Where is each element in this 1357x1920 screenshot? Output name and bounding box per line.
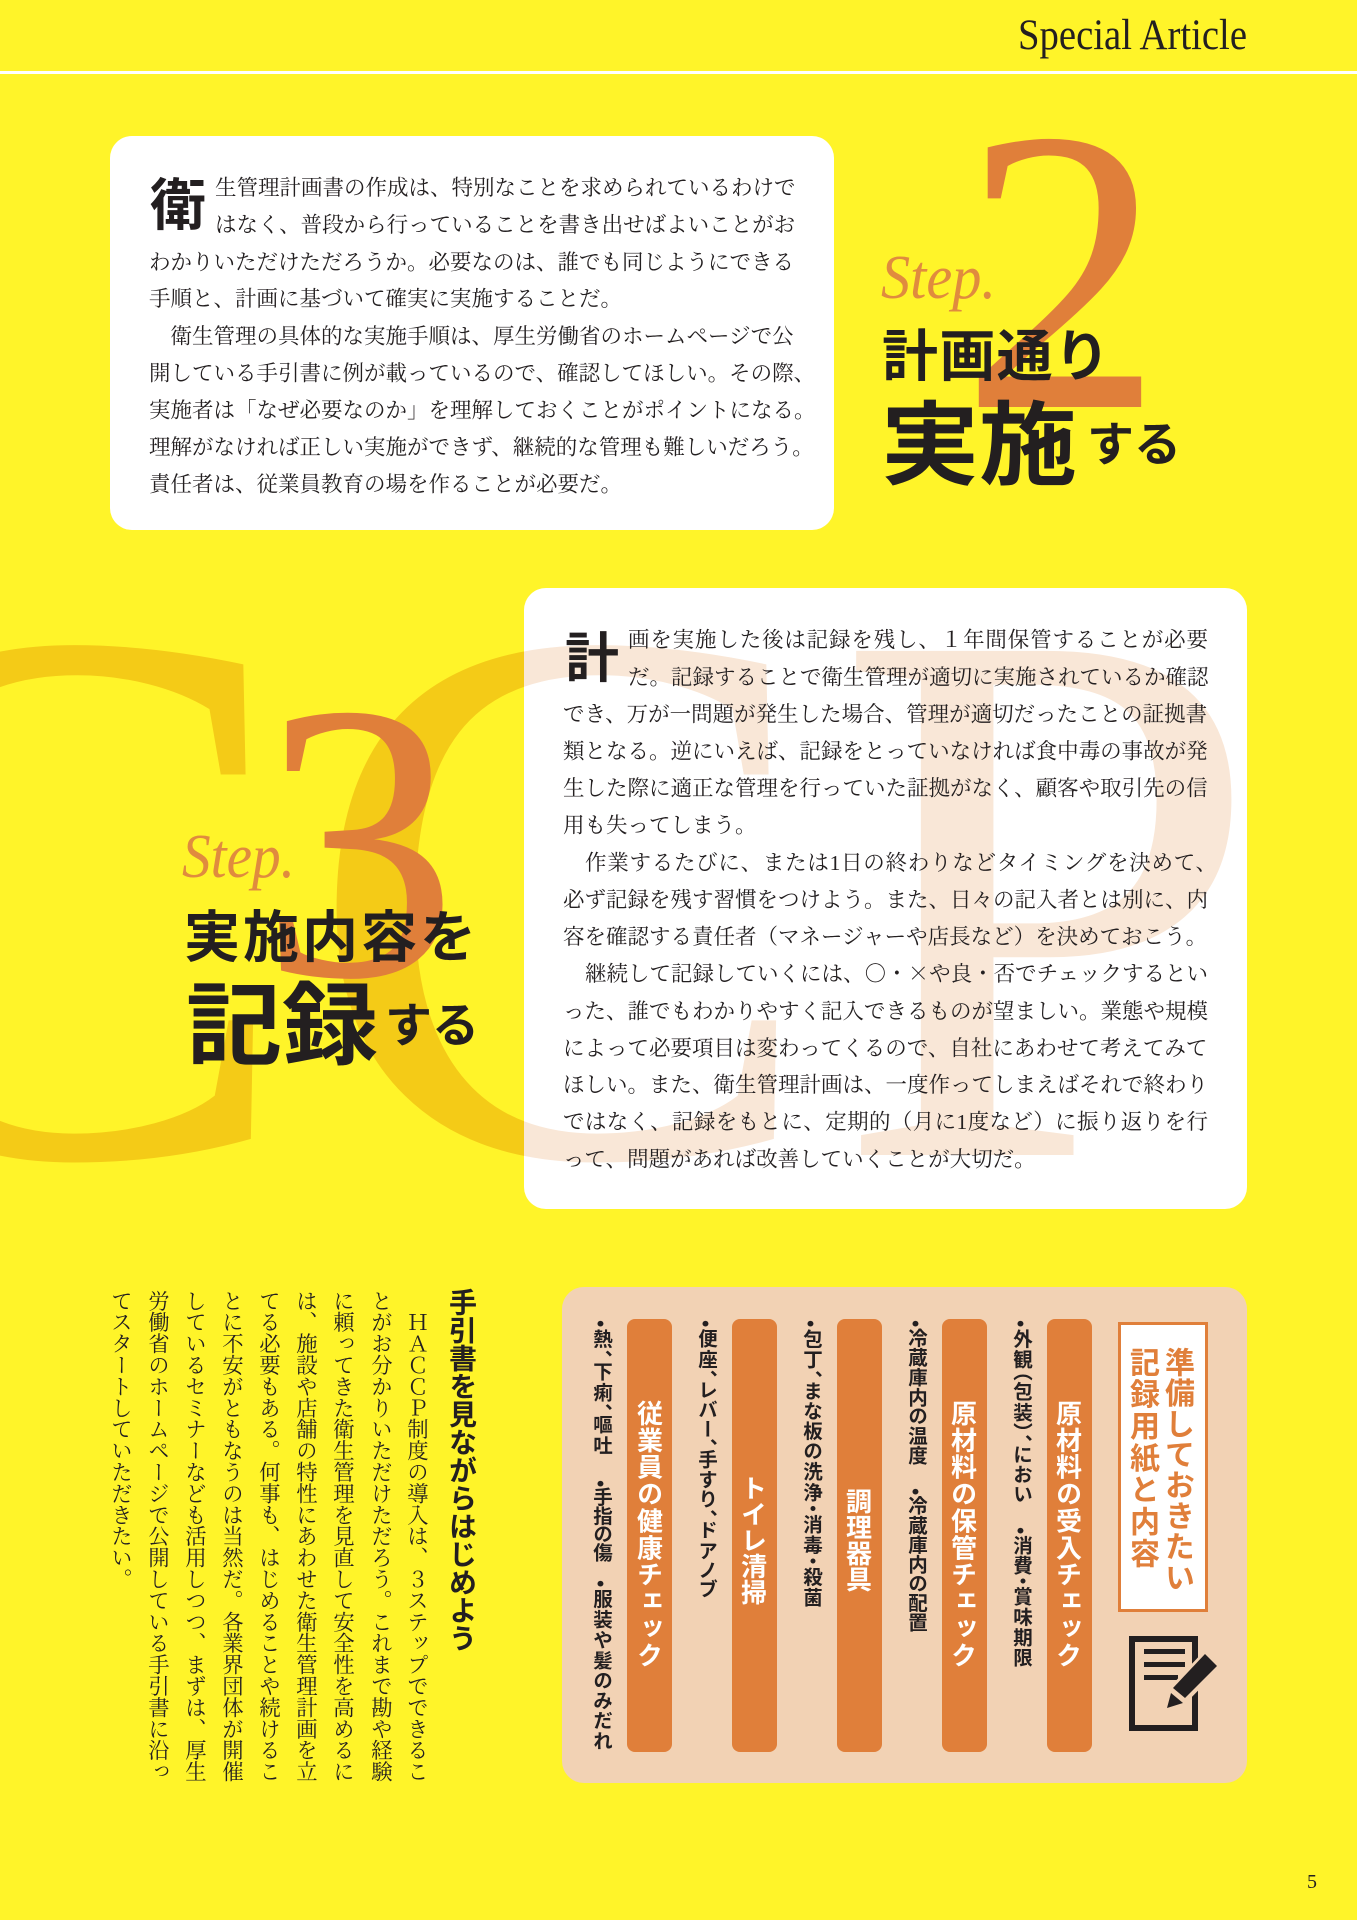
page number: 5: [1307, 1871, 1317, 1893]
body paragraphs step 3: 継続して記録していくには、○・×や良・否でチェックするとい: [585, 957, 1208, 988]
column: employee health: •服装や髪のみだれ: [588, 1580, 618, 1750]
body paragraphs step 3: 作業するたびに、または1日の終わりなどタイミングを決めて、: [585, 851, 1217, 875]
drop cap: 計: [565, 614, 619, 693]
heading: vertical closing section: 手引書を見ながらはじめよう: [443, 1288, 483, 1652]
body paragraphs step 3: 類となる。逆にいえば、記録をとっていなければ食中毒の事故が発: [563, 740, 1208, 764]
step 3 heading: Step.: [182, 823, 295, 891]
column: cooking utensils: [798, 1319, 882, 1752]
column: raw material storage: [904, 1319, 987, 1752]
column: toilet cleaning: トイレ清掃: [736, 1475, 772, 1605]
column: raw material storage: •冷蔵庫内の温度: [904, 1320, 932, 1465]
header: Special Article: [0, 12, 1357, 74]
big numeral 2: 2: [961, 46, 1164, 495]
body paragraphs step 3: 容を確認する責任者（マネージャーや店長など）を決めておこう。: [563, 925, 1207, 949]
watermark letters inside panel: C: [305, 469, 819, 1322]
column: raw material receiving: •消費・賞味期限: [1008, 1527, 1038, 1667]
column: raw material storage: •冷蔵庫内の配置: [904, 1488, 932, 1632]
column: raw material receiving: 原材料の受入チェック: [1050, 1400, 1088, 1668]
background letters CCP: C: [305, 469, 819, 1322]
column: raw material receiving: [1008, 1319, 1092, 1752]
drop cap: 衛: [150, 161, 206, 242]
vertical closing text: しているセミナーなども活用しつつ、まずは、厚生: [180, 1290, 212, 1782]
vertical closing text: に頼ってきた衛生管理を見直して安全性を高めるに: [328, 1290, 360, 1782]
title box: 記録用紙と内容: [1123, 1347, 1167, 1568]
column: employee health: [588, 1319, 672, 1752]
background letters CCP: [0, 469, 1262, 1322]
body paragraph step 2: 責任者は、従業員教育の場を作ることが必要だ。: [149, 472, 622, 496]
vertical closing text: てる必要もある。何事も、はじめることや続けるこ: [254, 1290, 286, 1782]
watermark letters inside panel: [524, 645, 1232, 1162]
step 2 heading: Step.: [881, 244, 996, 312]
step 2 heading: 実施: [881, 372, 1077, 504]
body paragraphs step 3: [563, 628, 1217, 1172]
body paragraph step 2: [149, 176, 816, 496]
vertical closing text: は、施設や店舗の特性にあわせた衛生管理計画を立: [292, 1290, 322, 1782]
body paragraph step 2: 手順と、計画に基づいて確実に実施することだ。: [149, 287, 622, 311]
body paragraph step 2: 開している手引書に例が載っているので、確認してほしい。その際、: [149, 362, 815, 386]
watermark letters inside panel: P: [834, 469, 1262, 1322]
body paragraphs step 3: によって必要項目は変わってくるので、自社にあわせて考えてみて: [563, 1036, 1207, 1060]
step 3 heading: 記録: [186, 953, 378, 1083]
body paragraphs step 3: 必ず記録を残す習慣をつけよう。また、日々の記入者とは別に、内: [563, 888, 1208, 912]
body paragraph step 2: 実施者は「なぜ必要なのか」を理解しておくことがポイントになる。: [149, 398, 816, 422]
big numeral 3: 3: [260, 622, 458, 1061]
body paragraph step 2: 生管理計画書の作成は、特別なことを求められているわけで: [215, 176, 796, 200]
background letters CCP: P: [834, 469, 1262, 1322]
column: raw material receiving: •外観（包装）、におい: [1008, 1320, 1038, 1502]
vertical closing text: てスタートしていただきたい。: [106, 1290, 138, 1590]
vertical closing text: 労働省のホームページで公開している手引書に沿っ: [144, 1290, 174, 1782]
body paragraphs step 3: ではなく、記録をもとに、定期的（月に1度など）に振り返りを行: [563, 1110, 1208, 1134]
vertical closing text: とに不安がともなうのは当然だ。各業界団体が開催: [218, 1290, 248, 1783]
column: cooking utensils: 調理器具: [840, 1488, 878, 1592]
body paragraph step 2: わかりいただけただろうか。必要なのは、誰でも同じようにできる: [149, 250, 794, 274]
body paragraphs step 3: だ。記録することで衛生管理が適切に実施されているか確認: [628, 666, 1210, 690]
title box: 準備しておきたい: [1158, 1347, 1202, 1592]
panel: step 2 body text: [110, 136, 834, 530]
column: toilet cleaning: •便座、レバー、手すり、ドアノブ: [694, 1320, 722, 1598]
panel: step 3 body text: [524, 588, 1247, 1209]
header: Special Article: Special Article: [1018, 12, 1247, 59]
body paragraphs step 3: った、誰でもわかりやすく記入できるものが望ましい。業態や規模: [563, 1000, 1209, 1024]
body paragraphs step 3: 用も失ってしまう。: [563, 814, 757, 838]
column: toilet cleaning: [694, 1319, 777, 1752]
column: raw material storage: 原材料の保管チェック: [946, 1400, 982, 1668]
body paragraphs step 3: 生した際に適正な管理を行っていた証拠がなく、顧客や取引先の信: [563, 776, 1208, 800]
icon: document and pencil: [1129, 1636, 1222, 1731]
body paragraphs step 3: 画を実施した後は記録を残し、１年間保管することが必要: [628, 628, 1208, 652]
vertical closing text: とがお分かりいただけただろう。これまで勘や経験: [366, 1290, 398, 1783]
column: employee health: •熱、下痢、嘔吐: [588, 1320, 618, 1455]
body paragraph step 2: 衛生管理の具体的な実施手順は、厚生労働省のホームページで公: [170, 324, 794, 348]
step 3 heading: 実施内容を: [184, 893, 476, 974]
body paragraph step 2: はなく、普段から行っていることを書き出せばよいことがお: [215, 213, 795, 237]
step 2 heading: する: [1087, 406, 1181, 475]
column: employee health: 従業員の健康チェック: [632, 1400, 668, 1668]
vertical closing text: [106, 1290, 434, 1783]
body paragraph step 2: 理解がなければ正しい実施ができず、継続的な管理も難しいだろう。: [149, 436, 814, 460]
title box: [1120, 1324, 1206, 1610]
vertical closing text: ＨＡＣＣＰ制度の導入は、３ステップでできるこ: [402, 1311, 434, 1782]
body paragraphs step 3: って、問題があれば改善していくことが大切だ。: [563, 1148, 1036, 1172]
panel: record sheet checklist: [562, 1287, 1247, 1783]
step 3 heading: する: [385, 987, 479, 1056]
step 2 heading: [881, 244, 1181, 504]
column: employee health: •手指の傷: [588, 1480, 618, 1563]
body paragraphs step 3: ほしい。また、衛生管理計画は、一度作ってしまえばそれで終わり: [563, 1073, 1208, 1097]
column: cooking utensils: •包丁、まな板の洗浄・消毒・殺菌: [798, 1320, 828, 1607]
body paragraphs step 3: でき、万が一問題が発生した場合、管理が適切だったことの証拠書: [563, 702, 1207, 726]
step 2 heading: 計画通り: [882, 312, 1110, 393]
step 3 heading: [182, 823, 479, 1083]
